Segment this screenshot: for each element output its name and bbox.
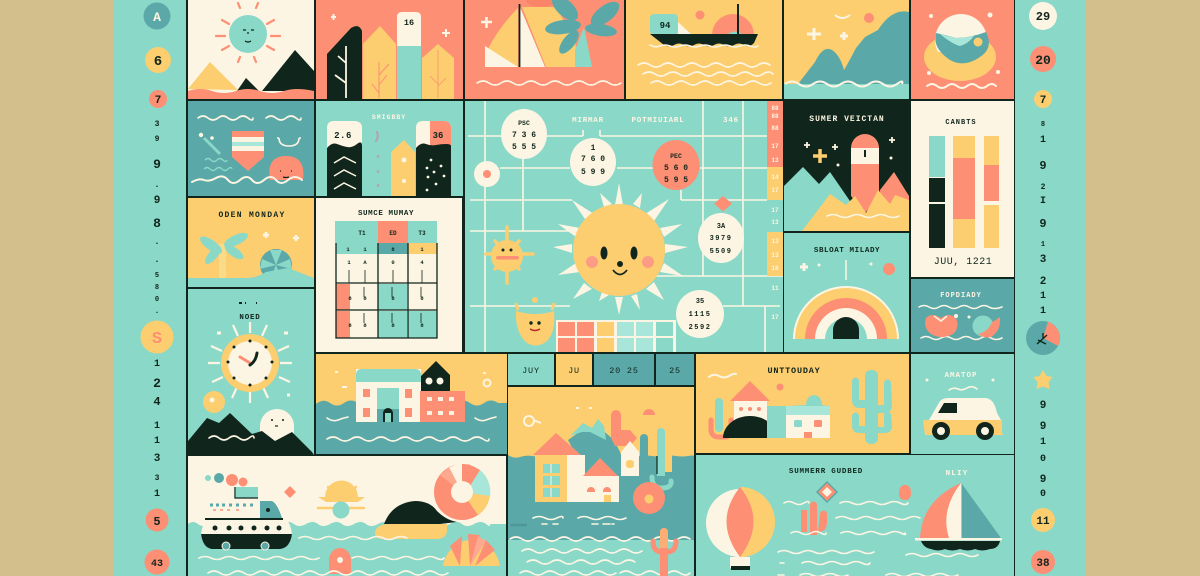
date tiles column: 13	[771, 157, 779, 164]
right number strip: 1	[1040, 437, 1046, 448]
date tab: 20 25: 20 25	[609, 366, 639, 376]
bubble: coral date: 5 9 5	[664, 176, 688, 185]
panel: summer vacation rocket	[784, 101, 909, 231]
right number strip: 11	[1036, 516, 1050, 528]
calendar grid: 4	[420, 259, 424, 266]
icon: mint sun with rays	[216, 3, 280, 62]
panel: center map	[465, 101, 783, 352]
calendar grid: T1	[358, 230, 366, 237]
left number strip: 1	[154, 436, 160, 447]
left number strip: 5	[155, 272, 159, 280]
icon: van	[923, 398, 1004, 440]
bubble: date 2	[570, 138, 616, 186]
bubble: date 3: 5509	[710, 248, 732, 256]
bubble: date 2: 7 6 0	[581, 155, 605, 164]
icon: smiling coral blob	[269, 156, 303, 180]
right number strip: 9	[1039, 159, 1047, 173]
left number strip: 3	[155, 474, 160, 483]
icon: diamond	[817, 482, 837, 502]
left number strip: 9	[153, 157, 161, 172]
right number strip: 1	[1040, 135, 1046, 146]
icon: red roof house	[730, 381, 770, 435]
icon: small sun	[486, 227, 533, 283]
bubble: coral date	[652, 140, 700, 190]
right number strip: 9	[1039, 217, 1047, 231]
panel: untouday	[696, 354, 909, 453]
panel: summer guide: SUMMERR GUDBED	[789, 468, 863, 476]
right number strip: 1	[1040, 306, 1046, 317]
right number strip: 1	[1040, 291, 1046, 302]
left number strip: 1	[154, 421, 160, 432]
panel: sailboat and palm	[465, 0, 624, 99]
panel: mint towers: SMIGBBY	[372, 114, 406, 121]
bubble: date 3	[698, 213, 744, 263]
panel: summer guide: NLIY	[946, 470, 968, 478]
panel: boat on yellow	[626, 0, 782, 99]
icon: striped shield	[232, 131, 264, 171]
icon: coral buoy	[329, 548, 351, 574]
right number strip: 38	[1036, 558, 1050, 570]
icon: coral sea plant	[801, 502, 827, 535]
bubble: date 1: 7 3 6	[512, 131, 536, 140]
calendar grid: 1	[363, 246, 367, 253]
icon: palm	[197, 230, 250, 266]
panel: summer vacation rocket: SUMER VEICTAN	[809, 115, 885, 124]
left number strip: .	[154, 237, 160, 247]
right number strip: 0	[1040, 454, 1046, 465]
bubble: date 4: 1115	[689, 311, 711, 319]
left number strip: 3	[155, 120, 160, 129]
heading: MIRMAR	[572, 117, 604, 125]
heading: 346	[723, 117, 739, 125]
left number strip: .	[154, 180, 160, 190]
bubble: date 2: 1	[591, 144, 596, 153]
left number strip: 43	[151, 559, 163, 570]
icon: life ring	[434, 464, 490, 520]
panel: globe on coral	[911, 0, 1014, 99]
date tiles column: 18	[771, 265, 779, 272]
left number strip: 1	[154, 489, 160, 500]
icon: tomato	[925, 315, 957, 337]
calendar grid: 1	[347, 259, 351, 266]
date tiles column: 88	[771, 125, 779, 132]
icon: coral cactus	[653, 528, 676, 576]
icon: main house	[533, 433, 585, 502]
left number strip: 9	[155, 135, 160, 144]
right number strip: 3	[1040, 254, 1047, 266]
panel: coral skyline: 16	[404, 18, 414, 28]
icon: target	[474, 161, 500, 187]
calendar grid: 8	[420, 295, 424, 302]
left number strip: 9	[154, 195, 160, 207]
date tab: JU: JU	[568, 366, 580, 376]
icon: ship	[201, 473, 292, 550]
calendar grid: 8	[391, 246, 395, 253]
panel: summer guide	[696, 455, 1014, 576]
panel: boat on yellow: 94	[660, 21, 671, 31]
date tiles column: 17	[771, 187, 779, 194]
panel: mint towers	[316, 101, 463, 196]
panel: noed clock: NOED	[239, 314, 261, 322]
icon: mint cactus	[640, 428, 672, 488]
date tiles column: 13	[771, 219, 779, 226]
left number strip: 8	[155, 284, 159, 292]
calendar grid: 1	[346, 246, 350, 253]
date tiles column: 11	[771, 285, 779, 292]
left number strip: S	[152, 330, 162, 349]
panel: yellow mountains	[784, 0, 909, 99]
icon: cream building	[356, 369, 421, 422]
left number strip: .	[154, 255, 160, 265]
date tab: 25	[656, 354, 694, 385]
left number strip: 7	[155, 95, 161, 107]
panel: village	[316, 354, 507, 454]
icon: ghost	[260, 409, 294, 445]
panel: ship and beach	[188, 456, 506, 576]
right number strip: 8	[1041, 121, 1045, 129]
right number strip: 9	[1040, 400, 1046, 412]
left number strip: 5	[153, 515, 161, 529]
icon: coral ring	[633, 482, 665, 514]
panel: canets chart: CANBTS	[945, 119, 977, 127]
bubble: date 3: 3979	[710, 235, 732, 243]
right number strip: 2	[1040, 276, 1046, 288]
icon: palm leaves	[544, 0, 623, 57]
bubble: date 4: 35	[696, 298, 704, 306]
panel: coral skyline	[316, 0, 463, 99]
right number strip: 0	[1040, 489, 1046, 500]
icon: coral building	[420, 391, 465, 422]
panel: fopdiady	[911, 279, 1014, 352]
bubble: date 1: PSC	[518, 120, 530, 127]
stacked bars	[929, 136, 999, 248]
panel: rainbow	[784, 233, 909, 352]
icon: fish	[972, 316, 1000, 338]
right number strip: 7	[1040, 95, 1046, 107]
date tab: 20 25	[594, 354, 654, 385]
date tiles column: 13	[771, 238, 779, 245]
icon: dark house	[421, 361, 450, 391]
right number strip: 29	[1036, 10, 1050, 24]
panel: noed clock	[188, 289, 314, 455]
date tab: JU	[556, 354, 592, 385]
calendar grid: 8	[363, 295, 367, 302]
date tiles column: 17	[771, 314, 779, 321]
date tab: JULY: JUY	[522, 366, 540, 376]
panel: canets chart	[911, 101, 1014, 277]
right number strip: 9	[1040, 421, 1046, 433]
left number strip: 1	[154, 359, 160, 370]
bubble: date 2: 5 9 9	[581, 168, 605, 177]
left number strip: A	[153, 10, 161, 25]
calendar grid: 8	[348, 322, 352, 329]
right number strip: 20	[1035, 53, 1051, 68]
left number strip: 6	[154, 54, 162, 70]
icon: dark island	[375, 501, 457, 539]
panel: seaside town	[508, 387, 694, 576]
panel: calendar	[316, 198, 462, 352]
icon: big smiling sun	[553, 183, 688, 315]
panel: sun and mountains	[188, 0, 314, 99]
calendar grid: A	[363, 259, 367, 266]
bubble: date 3: 3A	[717, 223, 726, 231]
bubble: date 4: 2592	[689, 324, 711, 332]
panel: mint towers: 36	[433, 131, 443, 141]
panel: open monday: ODEN MONDAY	[218, 211, 286, 220]
left number strip: 2	[153, 376, 161, 391]
panel: open monday	[188, 198, 314, 287]
panel: mint towers: 2.6	[334, 131, 352, 141]
icon: sun clock	[208, 322, 292, 403]
calendar grid: 8	[363, 322, 367, 329]
calendar grid: 8	[348, 295, 352, 302]
color tiles	[556, 320, 676, 352]
date tiles column: 88	[771, 113, 779, 120]
calendar grid: 8	[420, 322, 424, 329]
left number strip: .	[155, 307, 159, 316]
heading	[572, 117, 739, 125]
bubble: coral date: 5 6 0	[664, 164, 688, 173]
calendar grid: ED	[389, 230, 397, 237]
right number strip	[1016, 0, 1086, 576]
icon: rocket	[851, 134, 879, 213]
icon: beach ball	[260, 249, 292, 281]
bubble: coral date: PEC	[670, 153, 682, 160]
date tab: JULY	[508, 354, 554, 385]
date tab: 25: 25	[669, 366, 681, 376]
icon: mint house	[767, 395, 830, 438]
right number strip: 9	[1040, 474, 1046, 486]
left number strip: 8	[153, 216, 161, 231]
calendar grid	[335, 221, 437, 338]
icon: second house	[583, 458, 619, 502]
calendar grid: 0	[391, 259, 395, 266]
right number strip: 1	[1041, 241, 1045, 249]
date tiles column: 17	[771, 207, 779, 214]
date tiles column: 17	[771, 143, 779, 150]
right number strip: 2	[1041, 183, 1046, 192]
calendar grid: 8	[391, 295, 395, 302]
heading: POTMIUIARL	[631, 117, 685, 125]
icon: sailboat	[915, 483, 1002, 550]
icon: tall house	[621, 441, 639, 476]
panel: calendar: SUMCE MUMAY	[358, 210, 414, 218]
panel: canets chart: JUU, 1221	[934, 257, 992, 268]
icon: setting sun	[318, 481, 365, 518]
panel: untouday: UNTTOUDAY	[767, 366, 821, 376]
bubble: date 1	[501, 109, 547, 159]
date tiles column: 14	[771, 174, 779, 181]
date tiles column: 88	[771, 105, 779, 112]
panel: rainbow: SBLOAT MILADY	[814, 247, 880, 255]
icon: big cactus	[852, 370, 892, 444]
icon: crown face	[516, 297, 554, 346]
calendar grid: 8	[391, 322, 395, 329]
panel: amatop van: AMATOP	[944, 372, 978, 380]
left number strip: 4	[153, 395, 161, 409]
icon: rainbow arcs	[793, 286, 899, 339]
icon: shell fan	[443, 534, 500, 566]
left number strip: 0	[155, 296, 159, 304]
calendar grid: 1	[420, 246, 424, 253]
panel: amatop van	[911, 354, 1014, 454]
right number strip: I	[1040, 196, 1046, 207]
icon: coral diamond	[714, 196, 732, 212]
hills and chair shapes	[568, 409, 655, 480]
date tiles column: 13	[771, 252, 779, 259]
date tiles column	[767, 101, 783, 321]
icon: hot air balloon	[706, 487, 775, 570]
icon: dark dome	[723, 416, 777, 438]
bubble: date 1: 5 5 5	[512, 143, 536, 152]
bubble: date 4	[676, 290, 724, 338]
left number strip	[113, 0, 185, 576]
left number strip: 3	[154, 453, 161, 465]
calendar grid: T3	[418, 230, 426, 237]
dark mountains	[188, 413, 314, 455]
panel: fopdiady: FOPDIADY	[940, 292, 982, 300]
panel: teal sea with shield	[188, 101, 314, 196]
